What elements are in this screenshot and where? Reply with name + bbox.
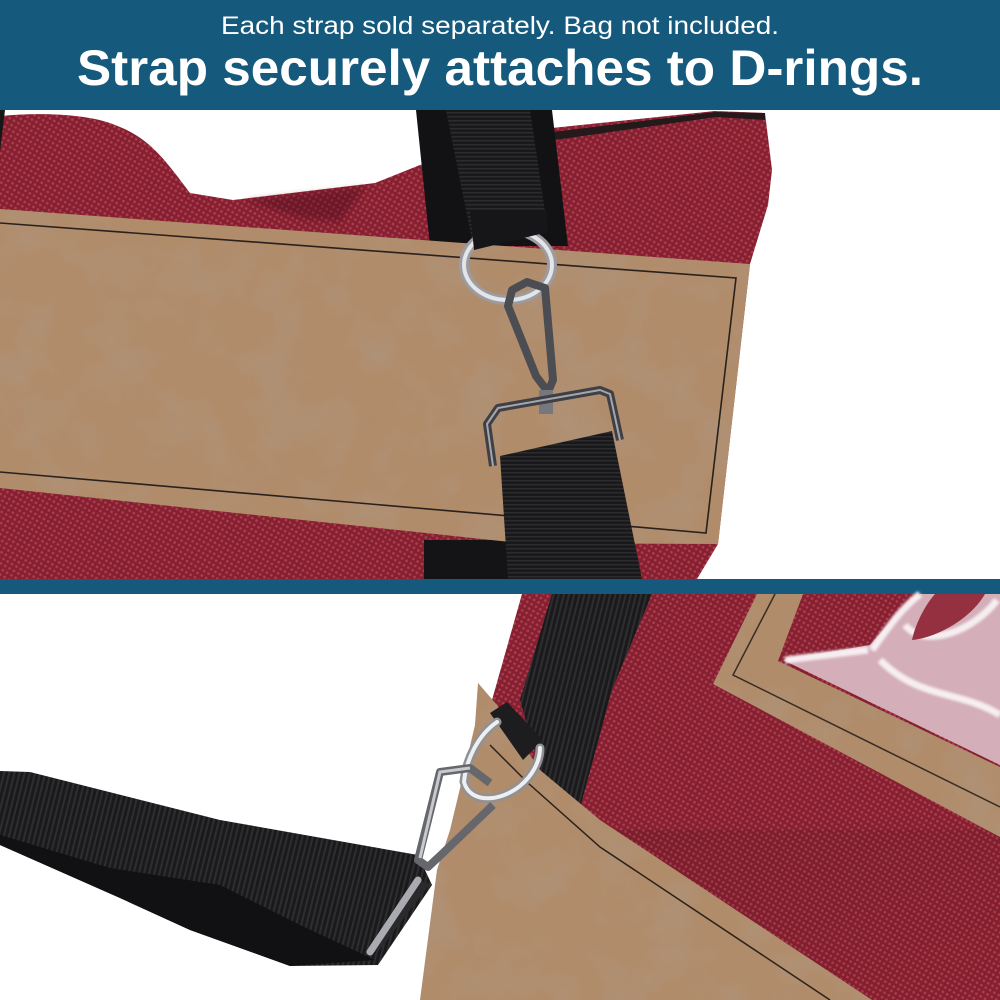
swivel bracket	[368, 878, 430, 952]
subtitle text: Each strap sold separately. Bag not included.	[221, 12, 779, 40]
photo: strap clipped to bag front	[0, 110, 772, 579]
photo: strap clipped to bag side	[0, 594, 1000, 1000]
bag handle	[416, 110, 568, 246]
lower handle strip	[424, 540, 524, 579]
hook highlight	[420, 768, 470, 858]
bag zipper edge	[553, 112, 765, 140]
header banner	[0, 0, 1000, 110]
D-ring highlight	[464, 722, 540, 798]
tan side panel	[420, 683, 872, 1000]
D-ring highlight	[464, 230, 552, 300]
handle centre webbing	[446, 110, 548, 250]
section divider bar	[0, 579, 1000, 594]
snap hook	[508, 282, 553, 392]
bag shading	[600, 830, 1000, 1000]
bag fold shading	[245, 187, 365, 222]
window interior	[778, 594, 1000, 767]
bracket highlight	[370, 880, 418, 952]
red bag body	[0, 111, 772, 579]
strap fold shadow	[0, 835, 375, 966]
side panel stitching	[490, 745, 830, 1000]
D-ring	[464, 230, 552, 300]
bracket highlight	[487, 390, 620, 466]
snap hook	[418, 768, 493, 867]
tan leather panel	[0, 209, 750, 544]
window stitching	[733, 594, 1000, 807]
strap tab over ring	[470, 210, 548, 250]
title text: Strap securely attaches to D-rings.	[77, 40, 923, 96]
clear vinyl sheen	[783, 594, 1000, 765]
left handle edge	[0, 110, 5, 152]
tan window frame	[713, 594, 1000, 837]
vinyl red reflection	[912, 594, 985, 640]
red bag body	[492, 594, 1000, 1000]
swivel post	[539, 390, 553, 414]
strap loop webbing	[0, 771, 432, 966]
swivel bracket	[487, 390, 620, 466]
vinyl highlights	[785, 594, 1000, 715]
panel stitching	[0, 223, 736, 533]
clip strap webbing	[500, 431, 642, 579]
bag black side seam	[520, 594, 652, 808]
D-ring	[464, 722, 540, 798]
strap tab at ring	[490, 702, 543, 760]
